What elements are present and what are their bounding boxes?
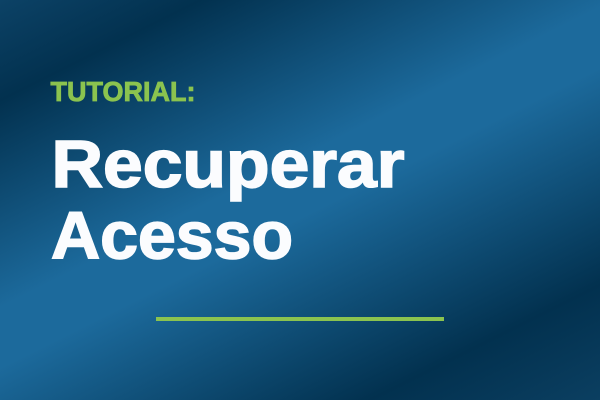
eyebrow label: TUTORIAL: [50,76,196,107]
title: Acesso [51,200,293,274]
title: Recuperar [52,128,404,202]
accent divider line [156,317,444,321]
title [51,128,404,274]
